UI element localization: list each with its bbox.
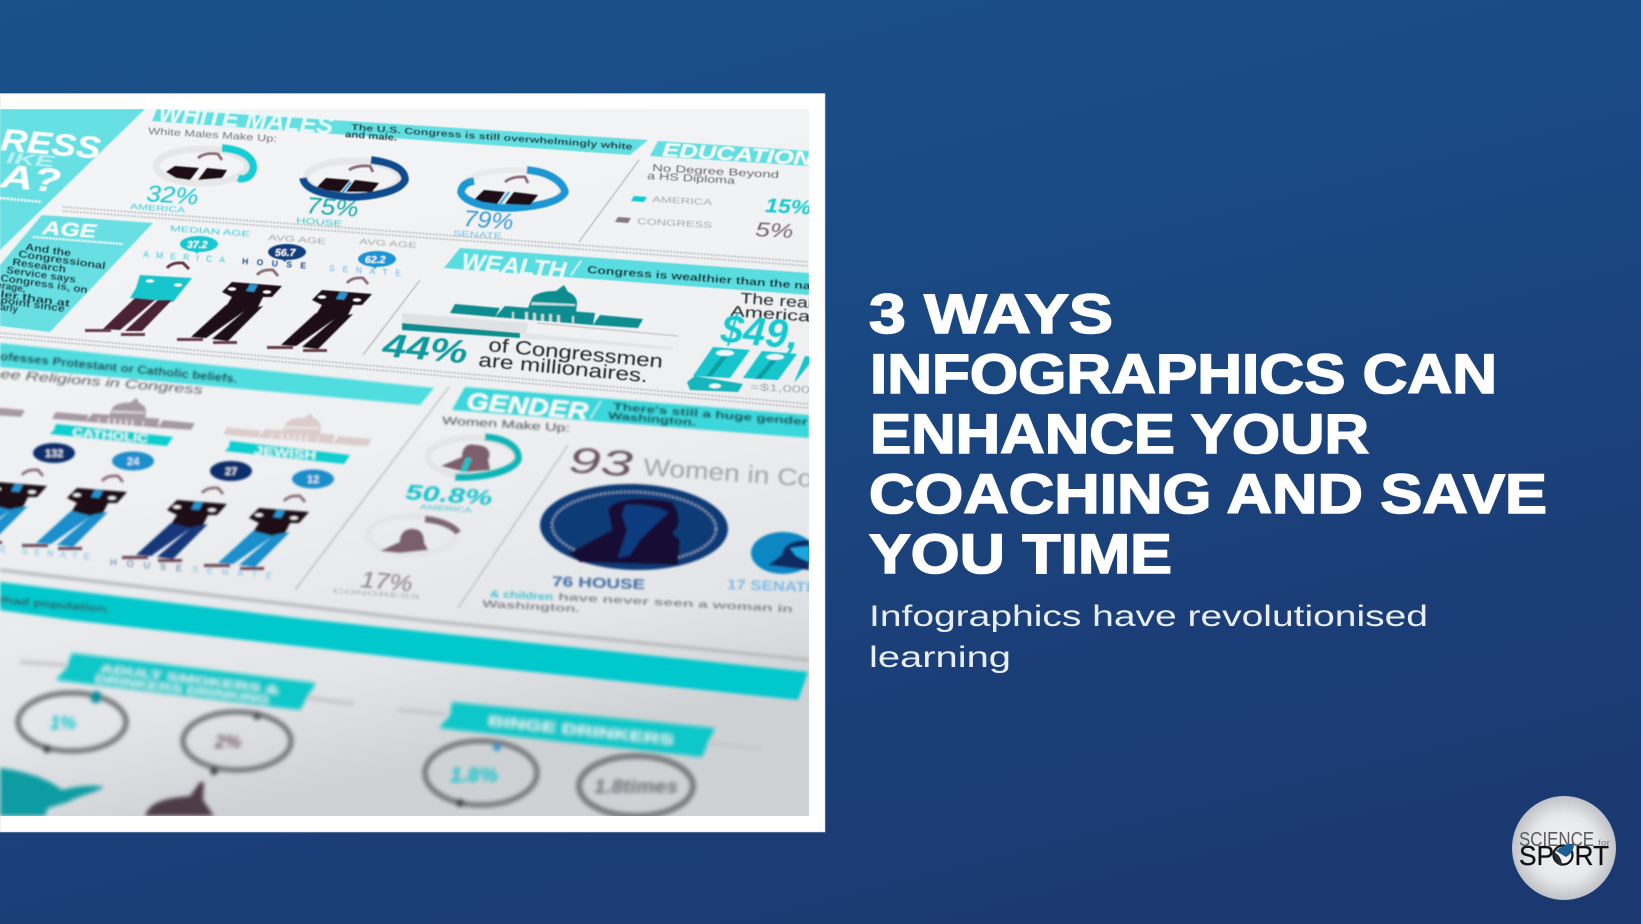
- middle section: age and wealth: [0, 215, 815, 408]
- panel: congress title: RESS: [0, 122, 102, 166]
- religion section: [0, 343, 449, 590]
- note: washington: Washington.: [482, 599, 581, 615]
- panel: age: point since: [0, 295, 66, 315]
- ring: one percent: 1%: [50, 713, 76, 733]
- percent: 79 senate: [454, 210, 514, 239]
- ribbon: jewish: [225, 441, 350, 464]
- icon: capitol partial: [0, 406, 26, 418]
- figure: america median age: MEDIAN AGE: [170, 224, 250, 239]
- banner: wealth: WEALTH: [461, 248, 568, 283]
- labels: house and senate: SENATE: [192, 564, 272, 581]
- bar: 44 percent millionaires: [402, 313, 678, 350]
- logo: science for sport: SPORT: [1519, 840, 1609, 871]
- logo: science for sport: [1512, 796, 1616, 900]
- map: congress: [145, 782, 214, 816]
- text: no degree beyond: No Degree Beyond: [652, 163, 779, 181]
- logo: science for sport: for: [1598, 840, 1611, 847]
- badge: 76 house: [539, 482, 729, 572]
- note: washington: [482, 589, 793, 615]
- ring: times: 1.8times: [594, 777, 678, 798]
- panel: age: Service says: [6, 265, 77, 286]
- ring: two percent: [183, 712, 291, 775]
- donut: senate 79 percent: [461, 170, 565, 208]
- subtitle: [869, 600, 1428, 674]
- labels: house and senate: [0, 544, 272, 581]
- stat: 50.8 percent america: AMERICA: [420, 504, 473, 515]
- text: no degree beyond: [647, 164, 779, 184]
- donut: america 32 percent: [156, 148, 253, 183]
- panel: congress title: [0, 109, 145, 250]
- icon: money stacks: [687, 347, 815, 392]
- figure: house average age: HOUSE: [242, 256, 307, 270]
- logo: science for sport: SCIENCE: [1519, 829, 1594, 851]
- banner: white males: [152, 100, 648, 155]
- bubble: 132: 132: [45, 448, 63, 460]
- figure: america median age: 37.2: [187, 239, 208, 251]
- label: white males make up: White Males Make Up:: [148, 126, 277, 145]
- text: of congressmen are millionaires: are millionaires.: [478, 350, 649, 387]
- ribbon: catholic: CATHOLIC: [72, 427, 148, 446]
- percent: 75 house: HOUSE: [296, 216, 342, 228]
- percent: 79 senate: 79%: [463, 205, 514, 234]
- title: ENHANCE YOUR: [870, 402, 1369, 465]
- stat: 50.8 percent america: 50.8%: [405, 481, 494, 510]
- percent: 32 america: [130, 184, 198, 214]
- stat: 93 women: Women in Co: [643, 454, 814, 493]
- panel: age: AGE: [40, 218, 99, 243]
- panel: age: arly: [0, 302, 19, 316]
- label: 17 senate: 17 SENATE: [727, 576, 817, 595]
- title: COACHING AND SAVE: [869, 462, 1547, 525]
- right edge highlight: [1641, 0, 1643, 924]
- panel: age: Congress is, on: [0, 273, 88, 296]
- banner: wealth: [444, 248, 811, 295]
- legend: america congress: [615, 194, 713, 230]
- panel: age: And the: [25, 242, 72, 259]
- donut: america 50.8 percent: [428, 437, 518, 477]
- bubble: 132: [33, 443, 75, 463]
- title: YOU TIME: [869, 522, 1172, 585]
- text: the real america: America: [730, 303, 812, 326]
- subtitle: learning: [869, 641, 1011, 674]
- stat: 93 women: [567, 439, 814, 493]
- banner: gender: Washington.: [608, 410, 697, 429]
- text: no degree beyond: a HS Diploma: [647, 171, 736, 187]
- title: INFOGRAPHICS CAN: [870, 342, 1497, 405]
- figure: house average age: AVG AGE: [268, 233, 326, 246]
- stat: 5 percent: 5%: [755, 219, 794, 243]
- bubble: 24: [112, 452, 154, 470]
- ribbon: catholic: [50, 424, 173, 446]
- legend: america congress: CONGRESS: [637, 216, 713, 230]
- banner: religion: ofesses Protestant or Catholic beliefs.: [0, 351, 238, 386]
- ribbon: adult smoking: [56, 653, 316, 710]
- percent: 32 america: 32%: [146, 180, 199, 210]
- panel: congress title: IKE: [6, 150, 57, 171]
- stat: 50.8 percent america: [405, 481, 494, 515]
- legend: america congress: AMERICA: [652, 194, 713, 207]
- ribbon: adult smoking: ADULT SMOKERS &: [100, 663, 280, 697]
- figure: senate average age: SENATE: [329, 263, 402, 278]
- figure: america median age: [85, 224, 250, 336]
- ribbon: binge drinkers: BINGE DRINKERS: [488, 713, 675, 747]
- percent: 75 house: [296, 196, 358, 227]
- bubble: 27: [210, 461, 252, 481]
- title: [869, 282, 1547, 585]
- ring: percent blue: 1.8%: [450, 764, 498, 787]
- text: of congressmen are millionaires: [478, 338, 662, 383]
- bubble: 24: 24: [127, 456, 140, 468]
- banner: religion: [0, 343, 434, 405]
- lower section: [0, 570, 809, 700]
- note: washington: & children: [490, 589, 553, 603]
- panel: congress title: A?: [0, 157, 62, 199]
- banner: gender: GENDER: [465, 388, 590, 426]
- text: the real america: [730, 292, 809, 322]
- text: general population: lhad population.: [0, 595, 111, 616]
- figure: house average age: [177, 233, 326, 344]
- stat: 17 percent congress: CONGRESS: [333, 588, 422, 601]
- labels: house and senate: E SENATE: [0, 544, 90, 562]
- panel: age: [0, 215, 153, 332]
- text: of congressmen are millionaires: of Congressmen: [488, 335, 664, 373]
- title: 3 WAYS: [869, 282, 1113, 345]
- ribbon: adult smoking: DRINKERS DRINKING: [95, 673, 270, 706]
- icon: capitol pink: [223, 413, 372, 446]
- banner: white males: and male.: [345, 129, 397, 143]
- icon: logo ball: [1554, 844, 1574, 866]
- stat: 17 percent congress: 17%: [360, 566, 414, 597]
- top section: white males and education: [0, 100, 814, 266]
- panel: age: Congressional: [18, 249, 107, 272]
- banner: wealth: Congress is wealthier than the na: [587, 264, 811, 292]
- ring: times: [579, 756, 693, 816]
- percent: 75 house: 75%: [306, 192, 359, 222]
- figure: catholic senate: [22, 476, 127, 550]
- percent: 32 america: AMERICA: [130, 202, 186, 215]
- bubble: 12: [292, 470, 334, 488]
- panel: age: Research: [12, 257, 67, 275]
- badge: 17 senate: [751, 532, 815, 574]
- labels: house and senate: HOUSE: [110, 557, 182, 573]
- ribbon: jewish: JEWISH: [254, 445, 317, 462]
- band: cyan divider: [0, 582, 808, 700]
- label: women make up: Women Make Up:: [442, 415, 570, 435]
- percent: 79 senate: SENATE: [453, 229, 502, 241]
- stat: 93 women: 93: [567, 439, 634, 484]
- ring: one percent: [18, 691, 126, 753]
- note: washington: have never seen a woman in: [558, 592, 793, 615]
- ring: two percent: 2%: [214, 732, 241, 752]
- ribbon: binge drinkers: [439, 702, 715, 757]
- figure: senate partial: [0, 470, 47, 544]
- map: america: [0, 768, 104, 816]
- stat: 15 percent: 15%: [765, 195, 812, 219]
- figure: america median age: AMERICA: [143, 249, 226, 265]
- figure: senate average age: AVG AGE: [359, 237, 417, 250]
- bubble: 12: 12: [307, 474, 319, 486]
- text: three religions in congress: ee Religions in Congress: [0, 367, 203, 397]
- icon: capitol mauve: [52, 398, 195, 430]
- bottom section: [0, 653, 760, 816]
- white photo frame: [0, 94, 825, 832]
- figure: house average age: 56.7: [275, 247, 297, 259]
- gender section: [333, 387, 817, 615]
- bubble: 27: 27: [225, 466, 237, 478]
- ring: percent blue: [425, 741, 537, 807]
- figure: jewish senate: [204, 496, 309, 570]
- donut: house 75 percent: [303, 160, 405, 197]
- banner: white males: WHITE MALES: [158, 100, 334, 140]
- banner: education: [650, 140, 809, 167]
- stat: 17 percent congress: [333, 566, 422, 601]
- stat: 44 percent: 44%: [380, 326, 469, 370]
- label: 76 house: 76 HOUSE: [552, 573, 645, 592]
- text: the real america: The real: [740, 290, 813, 312]
- stat: dollars: $49,: [718, 307, 801, 358]
- banner: white males: The U.S. Congress is still overwhelmingly white: [351, 122, 633, 152]
- photo of printed infographic: [0, 100, 817, 816]
- figure: senate average age: 62.2: [365, 254, 386, 266]
- figure: jewish house: [122, 488, 227, 562]
- banner: gender: There's still a huge gender: [613, 401, 808, 428]
- figure: senate average age: [267, 237, 417, 352]
- banner: gender: [452, 387, 809, 438]
- icon: capitol building: [450, 285, 643, 328]
- text: equals 1000: =$1,000: [750, 382, 811, 396]
- donut: congress 17 percent: [368, 516, 458, 554]
- banner: education: EDUCATION: [662, 140, 814, 170]
- subtitle: Infographics have revolutionised: [869, 600, 1428, 633]
- panel: age: ler than at: [0, 289, 71, 310]
